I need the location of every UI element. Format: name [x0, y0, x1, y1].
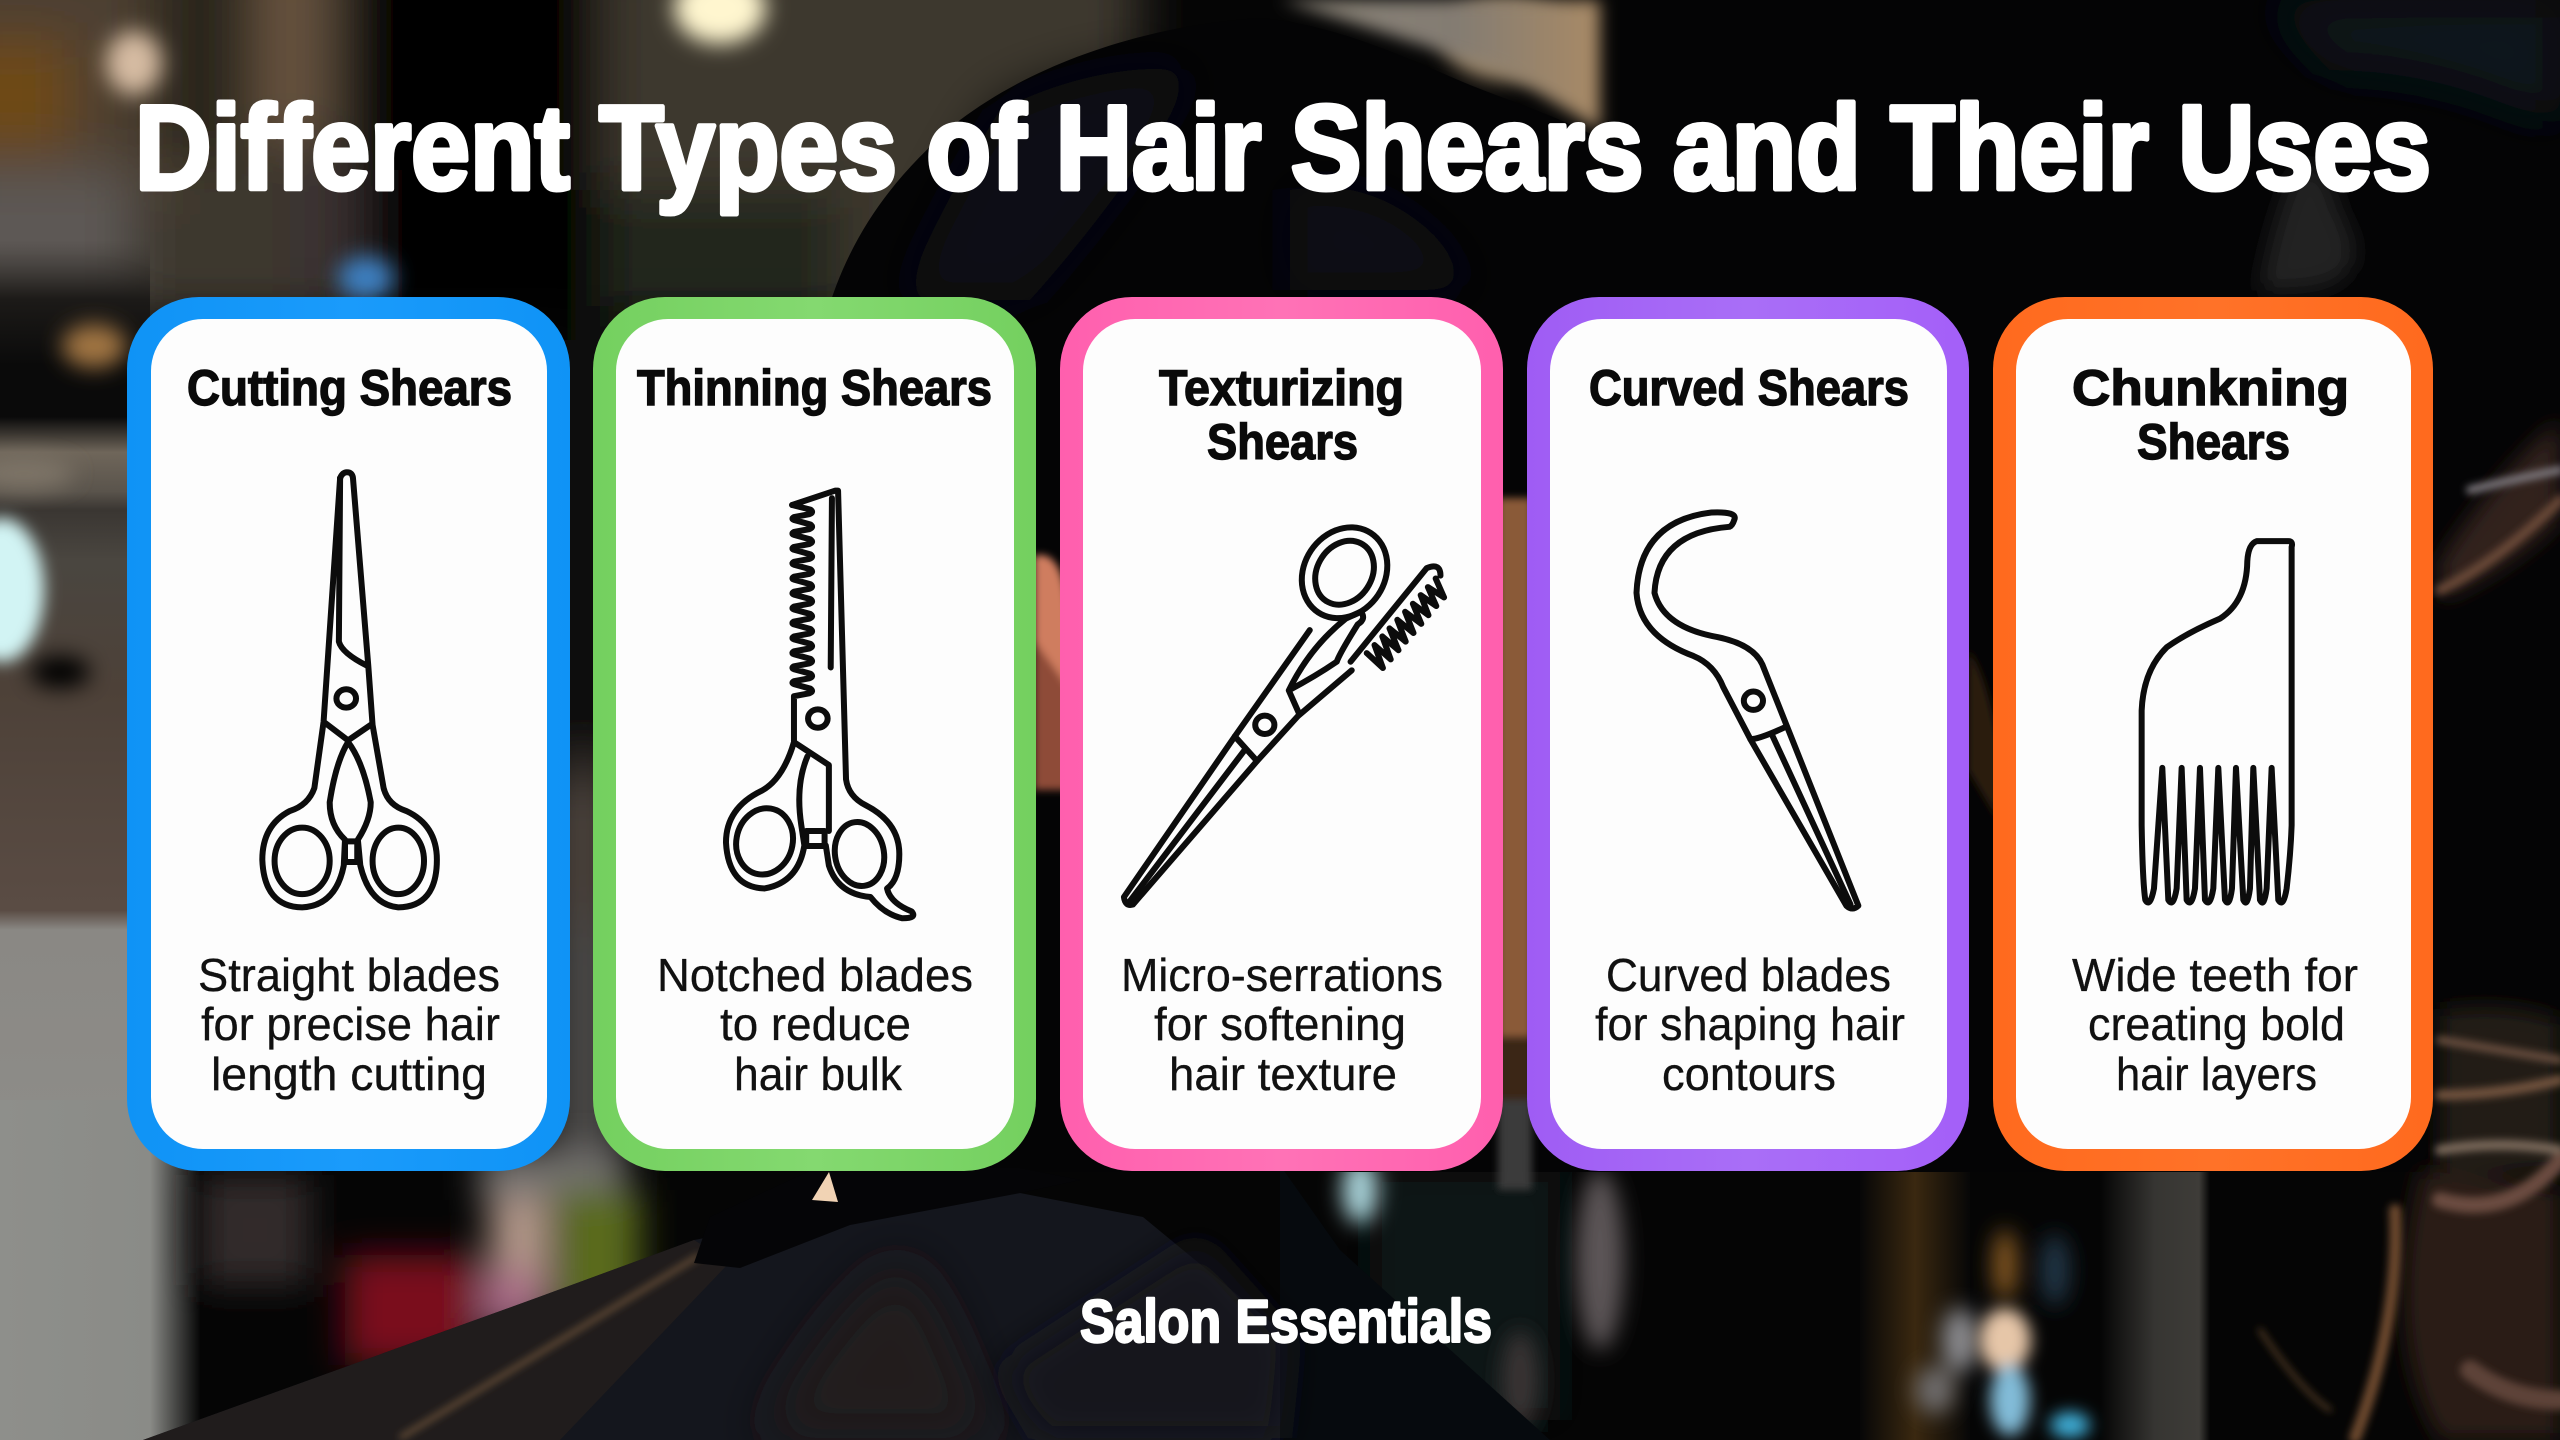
- description: texturizing shears: [1121, 949, 1443, 1100]
- description: curved shears: contours: [1662, 1048, 1836, 1100]
- description: thinning shears: [657, 949, 973, 1100]
- description: chunking shears: hair layers: [2116, 1048, 2317, 1100]
- heading: chunking shears: Shears: [2137, 414, 2290, 470]
- icon: chunking comb blade: [2142, 541, 2292, 903]
- heading: chunking shears: [2072, 360, 2349, 470]
- collar: [694, 1168, 1080, 1268]
- description: chunking shears: Wide teeth for: [2072, 949, 2358, 1001]
- icon: straight scissors: [262, 472, 437, 907]
- lower left grey wall: [0, 1100, 200, 1440]
- lower right blurred columns: [1860, 1165, 1970, 1440]
- barber cape: [143, 1193, 1480, 1440]
- description: cutting shears: length cutting: [211, 1048, 487, 1100]
- description: thinning shears: Notched blades: [657, 949, 973, 1001]
- footer caption: Salon Essentials: [1080, 1288, 1492, 1355]
- heading: texturizing shears: Texturizing: [1159, 360, 1404, 416]
- description: texturizing shears: for softening: [1154, 998, 1406, 1050]
- panel: curved shears: [1527, 297, 1969, 1171]
- heading: cutting shears: Cutting Shears: [187, 360, 512, 416]
- hair strands: [2260, 470, 2560, 1438]
- lower right shoulder shade: [1280, 1165, 1550, 1440]
- description: texturizing shears: hair texture: [1169, 1048, 1397, 1100]
- icon: thinning shears with notched blade: [726, 491, 913, 918]
- heading: texturizing shears: Shears: [1207, 414, 1358, 470]
- hair sheen patches: [900, 0, 2560, 300]
- description: chunking shears: [2072, 949, 2358, 1100]
- description: thinning shears: to reduce: [720, 998, 911, 1050]
- panel: cutting shears: [127, 297, 570, 1171]
- panel: chunking shears: [1993, 297, 2433, 1171]
- heading: curved shears: Curved Shears: [1589, 360, 1909, 416]
- ear and neck skin: [1034, 498, 1998, 1190]
- description: thinning shears: hair bulk: [734, 1048, 903, 1100]
- heading: chunking shears: Chunkning: [2072, 360, 2349, 416]
- panel: texturizing shears: [1060, 297, 1503, 1171]
- heading: thinning shears: Thinning Shears: [637, 360, 992, 416]
- upper wall behind head: [1240, 0, 1600, 130]
- panel: thinning shears: [593, 297, 1036, 1171]
- neck highlight: [812, 1172, 838, 1202]
- description: cutting shears: for precise hair: [201, 998, 500, 1050]
- description: cutting shears: Straight blades: [198, 949, 500, 1001]
- left column of blurred wall: [0, 240, 150, 1171]
- description: chunking shears: creating bold: [2088, 998, 2345, 1050]
- description: curved shears: Curved blades: [1606, 949, 1891, 1001]
- icon: texturizing shears with comb: [1124, 513, 1444, 905]
- heading: texturizing shears: [1159, 360, 1404, 470]
- description: texturizing shears: Micro-serrations: [1121, 949, 1443, 1001]
- icon: curved shears hook: [1637, 512, 1858, 909]
- client's hair: [825, 0, 2560, 1172]
- description: curved shears: [1595, 949, 1905, 1100]
- lower left blurred shelves: [200, 1150, 1560, 1420]
- description: cutting shears: [198, 949, 500, 1100]
- description: curved shears: for shaping hair: [1595, 998, 1905, 1050]
